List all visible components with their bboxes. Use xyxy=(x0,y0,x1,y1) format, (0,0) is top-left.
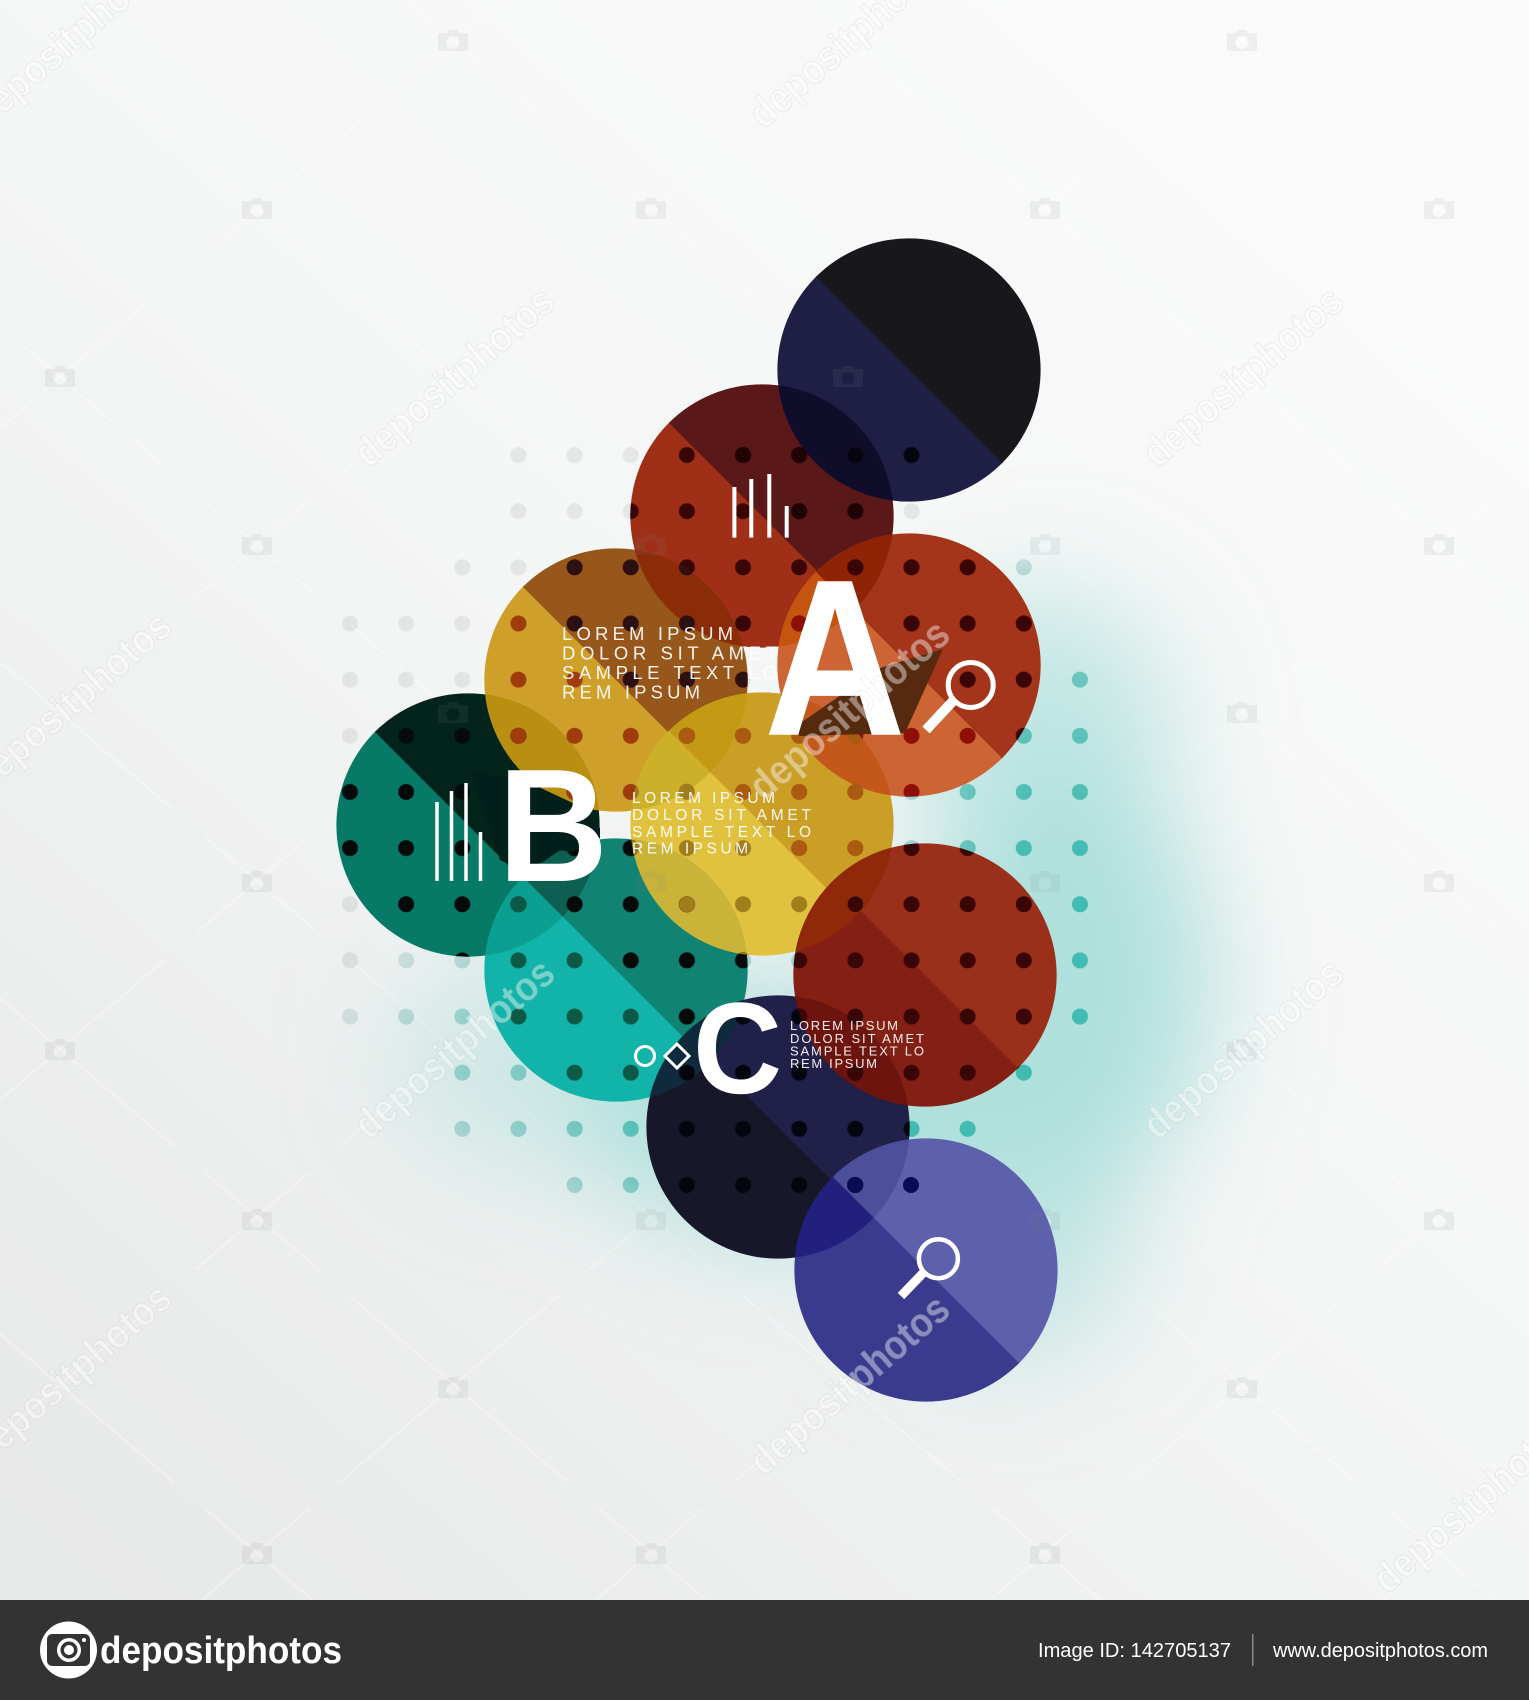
watermark text: depositphotos xyxy=(1133,949,1352,1148)
watermark text: depositphotos xyxy=(739,1285,958,1484)
watermark text: depositphotos xyxy=(344,949,563,1148)
icon: magnifier on orange circle xyxy=(926,662,993,730)
text block: red circle: REM IPSUM xyxy=(790,1056,877,1071)
circle: navy top xyxy=(777,238,1041,502)
long shadow of B xyxy=(470,770,600,870)
footer logo text: depositphotos xyxy=(100,1630,342,1672)
dots seen on circles xyxy=(342,446,1032,1194)
text block: red circle: DOLOR SIT AMET xyxy=(790,1031,924,1046)
text block: gold circle xyxy=(562,623,777,702)
image id: Image ID: 142705137 xyxy=(1038,1640,1231,1662)
circle: teal xyxy=(484,838,748,1102)
watermark text: depositphotos xyxy=(739,610,958,809)
text block: gold circle: LOREM IPSUM xyxy=(562,623,733,644)
icon: bars on dark red circle xyxy=(734,474,787,538)
text block: gold circle: REM IPSUM xyxy=(562,682,700,702)
text block: gold circle: SAMPLE TEXT LO xyxy=(562,662,777,683)
long shadow of A xyxy=(799,649,943,736)
heading letter B: B xyxy=(498,736,608,916)
circle: orange A xyxy=(777,533,1041,797)
text block: yellow circle xyxy=(632,790,812,858)
icon: magnifier on blue circle xyxy=(901,1239,958,1296)
icon: bars on green circle xyxy=(437,783,480,881)
circle: blue xyxy=(794,1138,1058,1402)
circle: dark red xyxy=(630,384,894,648)
text block: red circle: LOREM IPSUM xyxy=(790,1018,898,1033)
footer logo icon xyxy=(40,1622,97,1678)
footer bar xyxy=(0,1600,1529,1700)
circle overlaps xyxy=(456,385,1017,1289)
icon: small diamond xyxy=(665,1044,689,1068)
text block: yellow circle: SAMPLE TEXT LO xyxy=(632,824,811,841)
circle: yellow xyxy=(630,692,894,956)
circle: gold xyxy=(484,548,748,812)
circle: red xyxy=(793,843,1057,1107)
text block: gold circle: DOLOR SIT AMET xyxy=(562,642,777,664)
footer divider xyxy=(1252,1634,1254,1666)
heading letter C: C xyxy=(693,975,782,1121)
text block: red circle xyxy=(790,1018,924,1071)
teal glow behind circles xyxy=(390,590,1210,1360)
text block: red circle: SAMPLE TEXT LO xyxy=(790,1044,924,1058)
circle: green B xyxy=(336,693,600,957)
watermark text: depositphotos xyxy=(344,277,563,476)
website url: www.depositphotos.com xyxy=(1272,1640,1488,1662)
text block: yellow circle: LOREM IPSUM xyxy=(632,790,775,807)
watermark text: depositphotos xyxy=(1133,277,1352,476)
text block: yellow circle: DOLOR SIT AMET xyxy=(632,807,812,824)
circle: navy C xyxy=(646,995,910,1259)
text block: yellow circle: REM IPSUM xyxy=(632,840,748,858)
heading letter A: A xyxy=(765,534,905,781)
icon: small circle xyxy=(636,1046,654,1066)
dot grid on background xyxy=(342,447,1088,1194)
